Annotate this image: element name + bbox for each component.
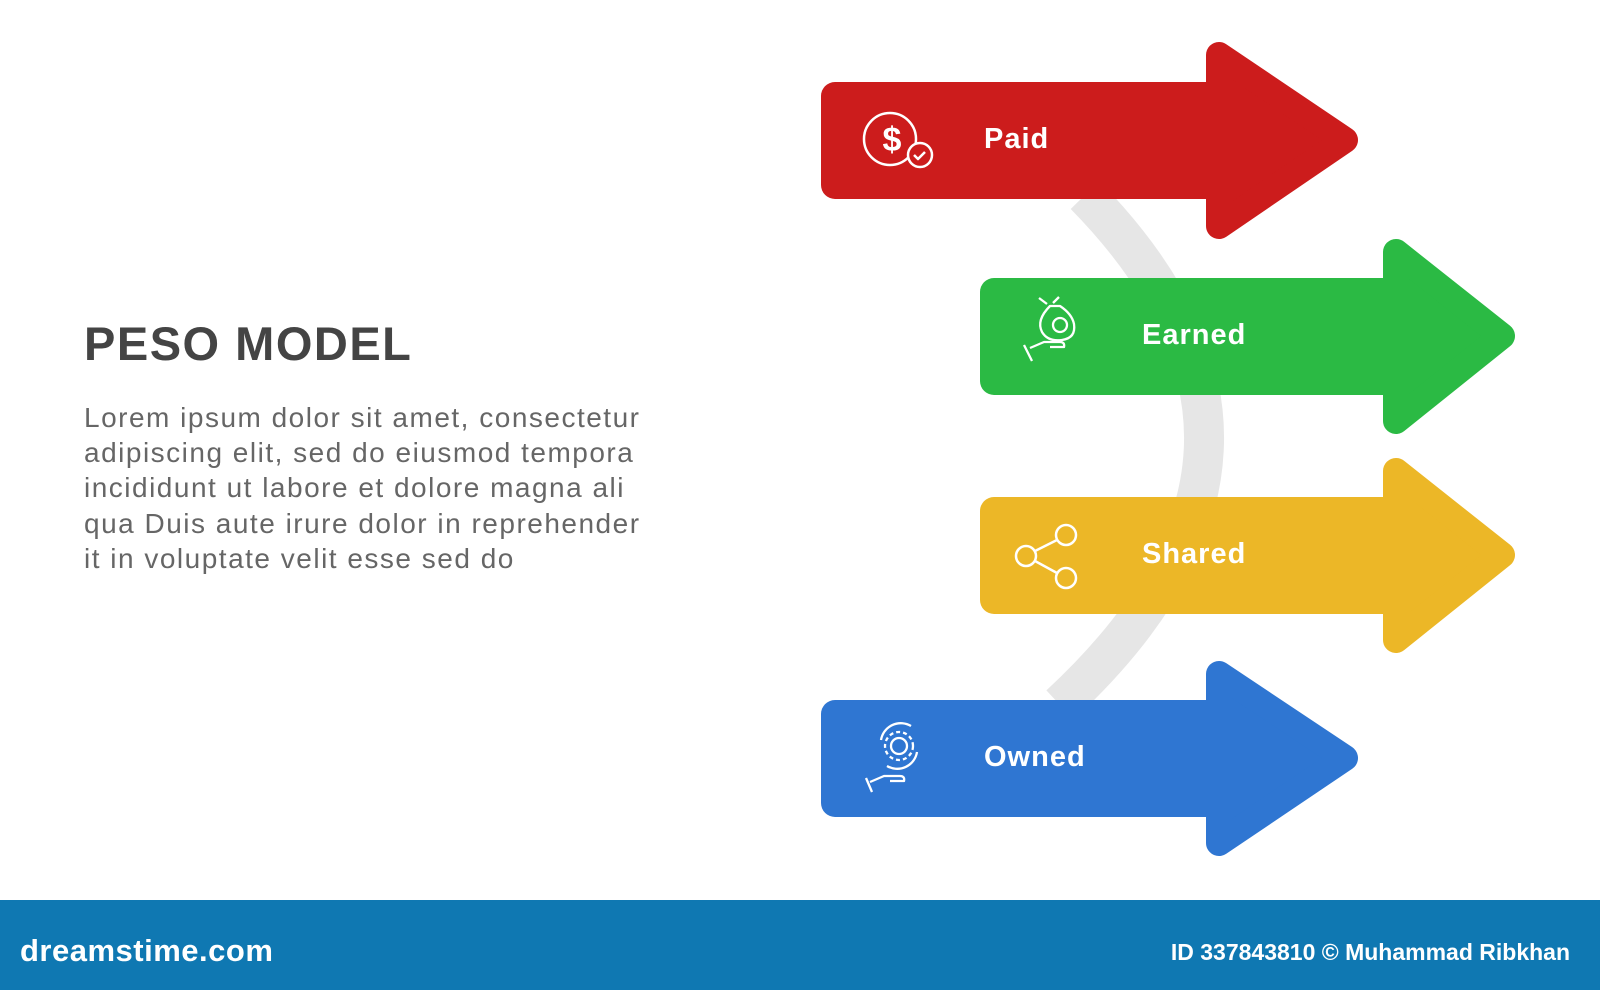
icon: dollar coin with check: [864, 113, 932, 167]
description text: incididunt ut labore et dolore magna ali: [84, 472, 625, 503]
description text: qua Duis aute irure dolor in reprehender: [84, 508, 641, 539]
icon: share: [1016, 525, 1076, 588]
label: Paid: Paid: [984, 123, 1049, 155]
icon: gear cycle in hand: [866, 723, 917, 792]
arrow: Earned: [980, 252, 1502, 421]
label: Shared: Shared: [1142, 538, 1246, 570]
footer bar: [0, 900, 1600, 990]
footer logo: dreamstime.com: [20, 933, 273, 968]
footer credit: ID 337843810 © Muhammad Ribkhan: [1171, 939, 1570, 965]
description text: [84, 402, 641, 574]
description text: adipiscing elit, sed do eiusmod tempora: [84, 437, 634, 468]
label: Earned: Earned: [1142, 319, 1246, 351]
arrow: Paid: $: [883, 121, 902, 159]
label: Owned: Owned: [984, 741, 1086, 773]
gray connector arc: [1060, 195, 1204, 705]
title: PESO MODEL: [84, 317, 412, 370]
description text: Lorem ipsum dolor sit amet, consectetur: [84, 402, 640, 433]
icon: money bag in hand: [1024, 297, 1074, 361]
arrow: Paid: [821, 55, 1345, 226]
arrow: Owned: [821, 674, 1345, 843]
description text: it in voluptate velit esse sed do: [84, 543, 515, 574]
arrow: Shared: [980, 471, 1502, 640]
